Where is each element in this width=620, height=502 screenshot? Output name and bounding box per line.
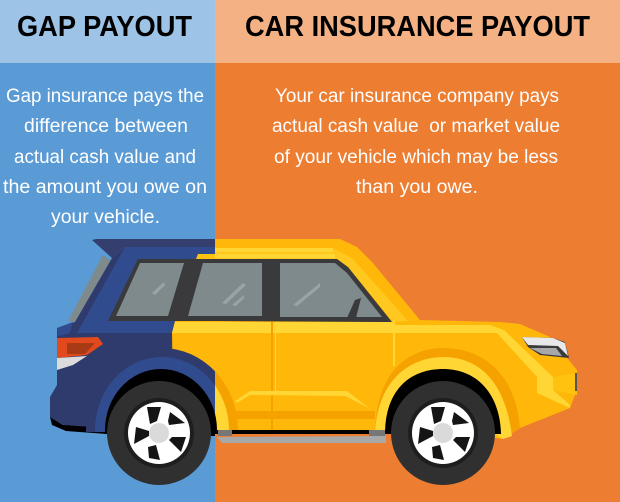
text block: car insurance explanation: Your car insurance company pays	[275, 86, 559, 107]
heading band: gap payout: GAP PAYOUT	[17, 11, 192, 43]
panel: gap payout background	[0, 63, 215, 502]
text block: gap insurance explanation	[3, 86, 207, 228]
heading band: gap payout	[0, 0, 215, 63]
text block: gap insurance explanation: difference between	[24, 116, 188, 137]
text block: gap insurance explanation: actual cash value and	[14, 147, 196, 168]
illustration: car split in two colours	[50, 239, 577, 502]
text block: gap insurance explanation: the amount you owe on	[3, 177, 207, 198]
text block: gap insurance explanation: your vehicle.	[51, 207, 160, 228]
text block: car insurance explanation: actual cash value or market value	[272, 116, 560, 137]
heading band: car insurance payout	[215, 0, 620, 63]
icon: headlight	[522, 337, 569, 358]
car rear half: navy	[50, 239, 215, 436]
text block: car insurance explanation: of your vehicle which may be less	[274, 147, 558, 168]
text block: car insurance explanation: than you owe.	[356, 177, 478, 198]
panel: car insurance payout background	[215, 63, 620, 502]
heading band: car insurance payout: CAR INSURANCE PAYOUT	[245, 11, 590, 43]
rear wheel	[107, 381, 211, 485]
text block: car insurance explanation	[272, 86, 560, 198]
front wheel	[391, 381, 495, 485]
text block: gap insurance explanation: Gap insurance pays the	[6, 86, 204, 107]
car front half: yellow	[215, 239, 577, 443]
